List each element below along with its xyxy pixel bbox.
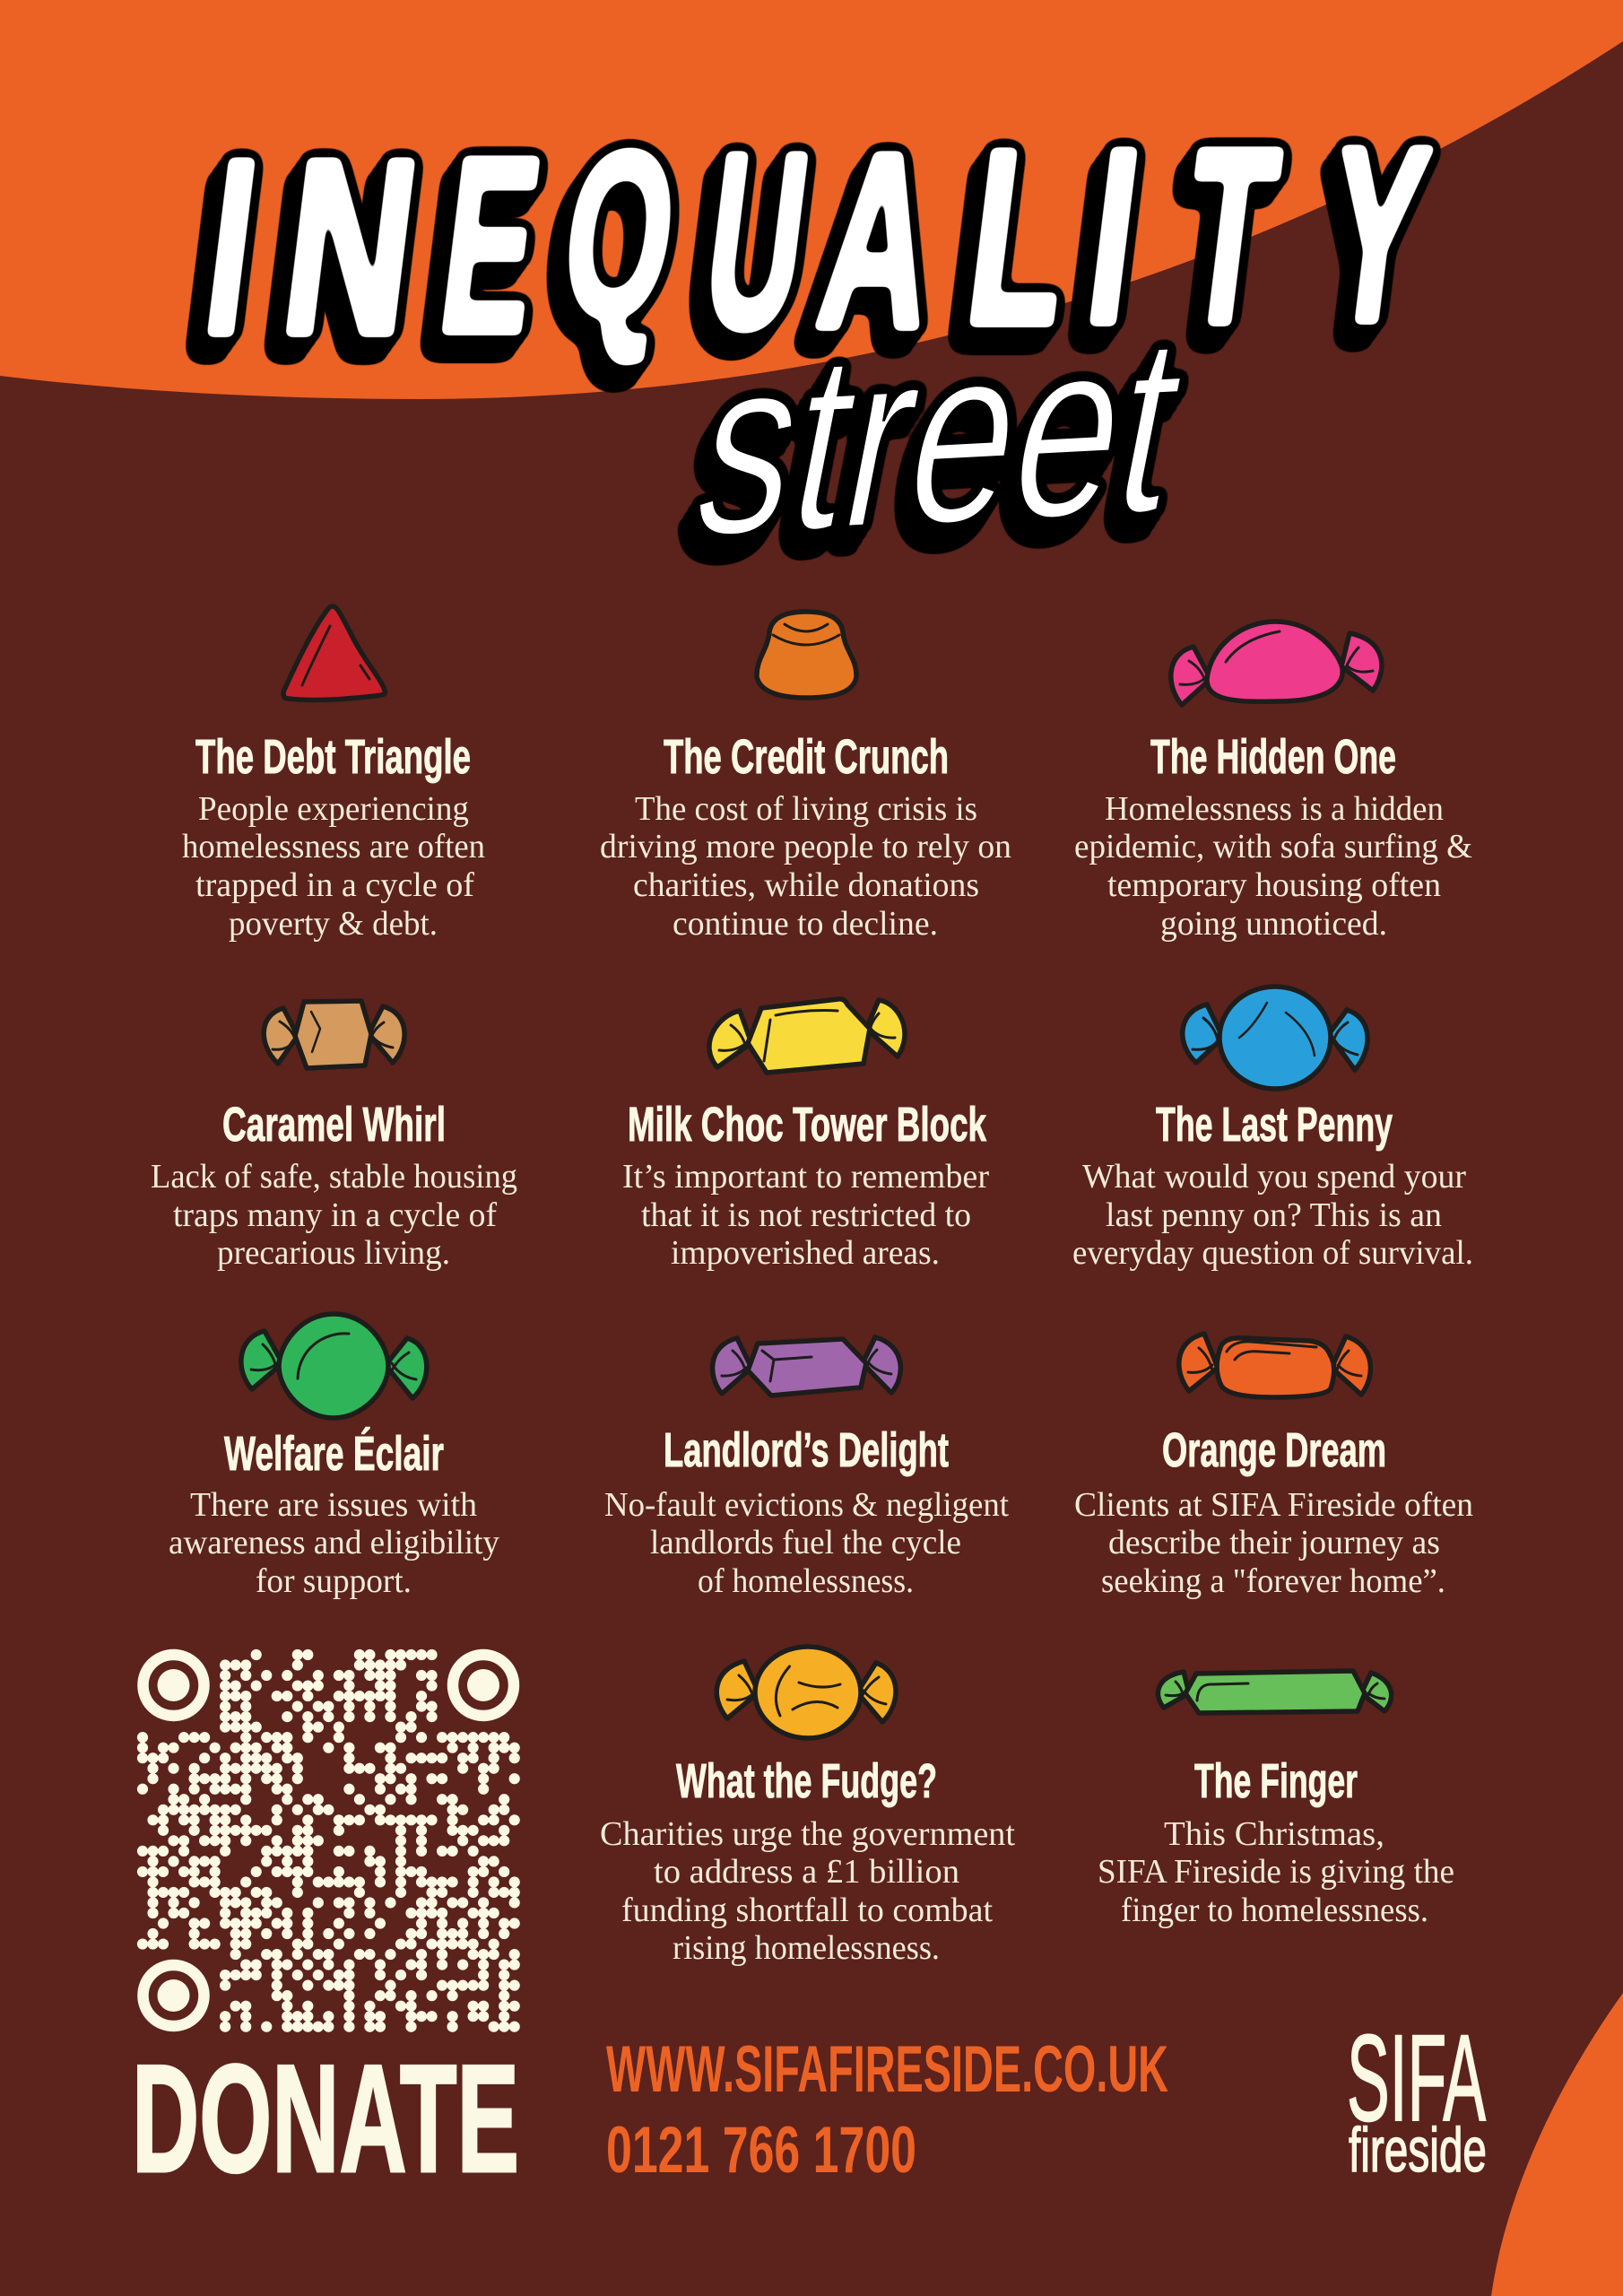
panel: Milk Choc Tower Block bbox=[622, 999, 989, 1272]
body text: There are issues with bbox=[190, 1486, 477, 1524]
body text: driving more people to rely on bbox=[600, 828, 1011, 865]
body text: temporary housing often bbox=[1107, 866, 1441, 904]
title: INEQUALITY: Y bbox=[1313, 94, 1441, 375]
body text: charities, while donations bbox=[633, 866, 979, 904]
body text: The cost of living crisis is bbox=[635, 790, 977, 828]
title: street: street bbox=[677, 283, 1204, 590]
body text: continue to decline. bbox=[673, 905, 938, 943]
icon: orange gum sweet bbox=[757, 612, 856, 698]
heading: Milk Choc Tower Block bbox=[628, 1098, 987, 1152]
body text: awareness and eligibility bbox=[169, 1524, 499, 1561]
body text: last penny on? This is an bbox=[1106, 1196, 1442, 1234]
QR code bbox=[143, 1655, 515, 2027]
panel: What the Fudge? bbox=[600, 1647, 1015, 1967]
body text: landlords fuel the cycle bbox=[650, 1524, 961, 1561]
QR finder: top right bbox=[453, 1655, 514, 1716]
logo: SIFA fireside: SIFA bbox=[1347, 2010, 1486, 2147]
body text: to address a £1 billion bbox=[654, 1853, 959, 1891]
body text bbox=[151, 1158, 517, 1272]
orange bottom-right corner curve bbox=[1491, 1993, 1623, 2296]
panel: The Hidden One bbox=[1074, 622, 1472, 943]
heading: Caramel Whirl bbox=[222, 1098, 446, 1152]
body text: describe their journey as bbox=[1108, 1524, 1440, 1561]
panel: The Credit Crunch bbox=[600, 612, 1011, 943]
QR finder: bottom left bbox=[143, 1965, 204, 2026]
title: INEQUALITY: I bbox=[193, 107, 270, 387]
icon: red triangle sweet bbox=[283, 606, 385, 700]
icon: green wrapped sweet bbox=[241, 1314, 427, 1418]
body text: SIFA Fireside is giving the bbox=[1098, 1853, 1454, 1891]
icon: amber wrapped sweet bbox=[716, 1647, 896, 1738]
icon: blue wrapped sweet bbox=[1183, 987, 1367, 1089]
website address: WWW.SIFAFIRESIDE.CO.UK bbox=[606, 2033, 1168, 2106]
body text bbox=[182, 790, 485, 943]
body text: precarious living. bbox=[217, 1234, 450, 1272]
body text bbox=[600, 790, 1011, 943]
body text: People experiencing bbox=[198, 790, 469, 828]
body text bbox=[1098, 1815, 1454, 1929]
logo: SIFA fireside bbox=[1347, 2010, 1487, 2185]
title: INEQUALITY: A bbox=[806, 101, 950, 381]
body text: that it is not restricted to bbox=[641, 1196, 971, 1234]
heading: Orange Dream bbox=[1162, 1423, 1386, 1477]
body text: This Christmas, bbox=[1164, 1815, 1384, 1853]
body text bbox=[1072, 1158, 1473, 1272]
body text: everyday question of survival. bbox=[1072, 1234, 1473, 1272]
body text: of homelessness. bbox=[698, 1562, 914, 1600]
body text: going unnoticed. bbox=[1160, 905, 1387, 943]
body text bbox=[600, 1815, 1015, 1967]
logo: SIFA fireside: fireside bbox=[1349, 2115, 1487, 2185]
heading: The Finger bbox=[1194, 1754, 1358, 1808]
heading: What the Fudge? bbox=[676, 1754, 937, 1808]
body text: impoverished areas. bbox=[671, 1234, 940, 1272]
icon: orange wrapped sweet bbox=[1179, 1334, 1370, 1397]
phone number: 0121 766 1700 bbox=[606, 2114, 916, 2187]
body text: It’s important to remember bbox=[622, 1158, 989, 1196]
panel: Caramel Whirl bbox=[151, 1001, 517, 1272]
QR finder: top left bbox=[143, 1655, 204, 1716]
heading: The Last Penny bbox=[1156, 1098, 1393, 1152]
body text: seeking a "forever home”. bbox=[1101, 1562, 1445, 1600]
body text: Lack of safe, stable housing bbox=[151, 1158, 517, 1196]
title: INEQUALITY: Q bbox=[551, 102, 689, 366]
icon: caramel wrapped sweet bbox=[264, 1001, 404, 1068]
orange top swoosh bbox=[0, 0, 1623, 399]
title: INEQUALITY: N bbox=[270, 108, 431, 387]
title: INEQUALITY: I bbox=[1075, 96, 1152, 377]
icon: pink wrapped sweet bbox=[1171, 622, 1382, 705]
heading: The Hidden One bbox=[1150, 730, 1396, 784]
body text: trapped in a cycle of bbox=[195, 866, 474, 904]
QR dot modules bbox=[143, 1655, 515, 2027]
body text: rising homelessness. bbox=[673, 1929, 940, 1967]
body text: No-fault evictions & negligent bbox=[604, 1486, 1009, 1524]
body text bbox=[1074, 1486, 1473, 1600]
panel: Landlord’s Delight bbox=[604, 1337, 1009, 1600]
panel: The Debt Triangle bbox=[182, 606, 485, 943]
body text: Homelessness is a hidden bbox=[1105, 790, 1444, 828]
icon: green finger sweet bbox=[1158, 1671, 1392, 1713]
body text: homelessness are often bbox=[182, 828, 485, 865]
body text: poverty & debt. bbox=[229, 905, 438, 943]
icon: yellow wrapped sweet bbox=[709, 999, 905, 1073]
body text bbox=[1074, 790, 1472, 943]
icon: purple wrapped sweet bbox=[713, 1337, 900, 1396]
body text: What would you spend your bbox=[1082, 1158, 1466, 1196]
body text: traps many in a cycle of bbox=[173, 1196, 497, 1234]
panel: Welfare Éclair bbox=[169, 1314, 499, 1600]
title: INEQUALITY: E bbox=[428, 104, 553, 385]
title: INEQUALITY: U bbox=[692, 100, 821, 381]
heading: The Debt Triangle bbox=[195, 730, 471, 784]
panel: The Last Penny bbox=[1072, 987, 1473, 1272]
body text bbox=[604, 1486, 1009, 1600]
body text bbox=[169, 1486, 499, 1600]
body text: Clients at SIFA Fireside often bbox=[1074, 1486, 1473, 1524]
heading: The Credit Crunch bbox=[664, 730, 949, 784]
body text: funding shortfall to combat bbox=[621, 1892, 993, 1929]
body text: finger to homelessness. bbox=[1121, 1892, 1428, 1929]
panel: Orange Dream bbox=[1074, 1334, 1473, 1600]
body text: Charities urge the government bbox=[600, 1815, 1015, 1853]
title: INEQUALITY: T bbox=[1170, 96, 1290, 377]
heading: Landlord’s Delight bbox=[664, 1423, 949, 1477]
heading: Welfare Éclair bbox=[224, 1427, 444, 1481]
body text bbox=[622, 1158, 989, 1272]
title: INEQUALITY: L bbox=[955, 97, 1084, 378]
body text: epidemic, with sofa surfing & bbox=[1074, 828, 1472, 865]
body text: for support. bbox=[256, 1562, 412, 1600]
title: INEQUALITY bbox=[193, 94, 1441, 387]
panel: The Finger bbox=[1098, 1671, 1454, 1929]
DONATE label: DONATE bbox=[132, 2033, 519, 2205]
